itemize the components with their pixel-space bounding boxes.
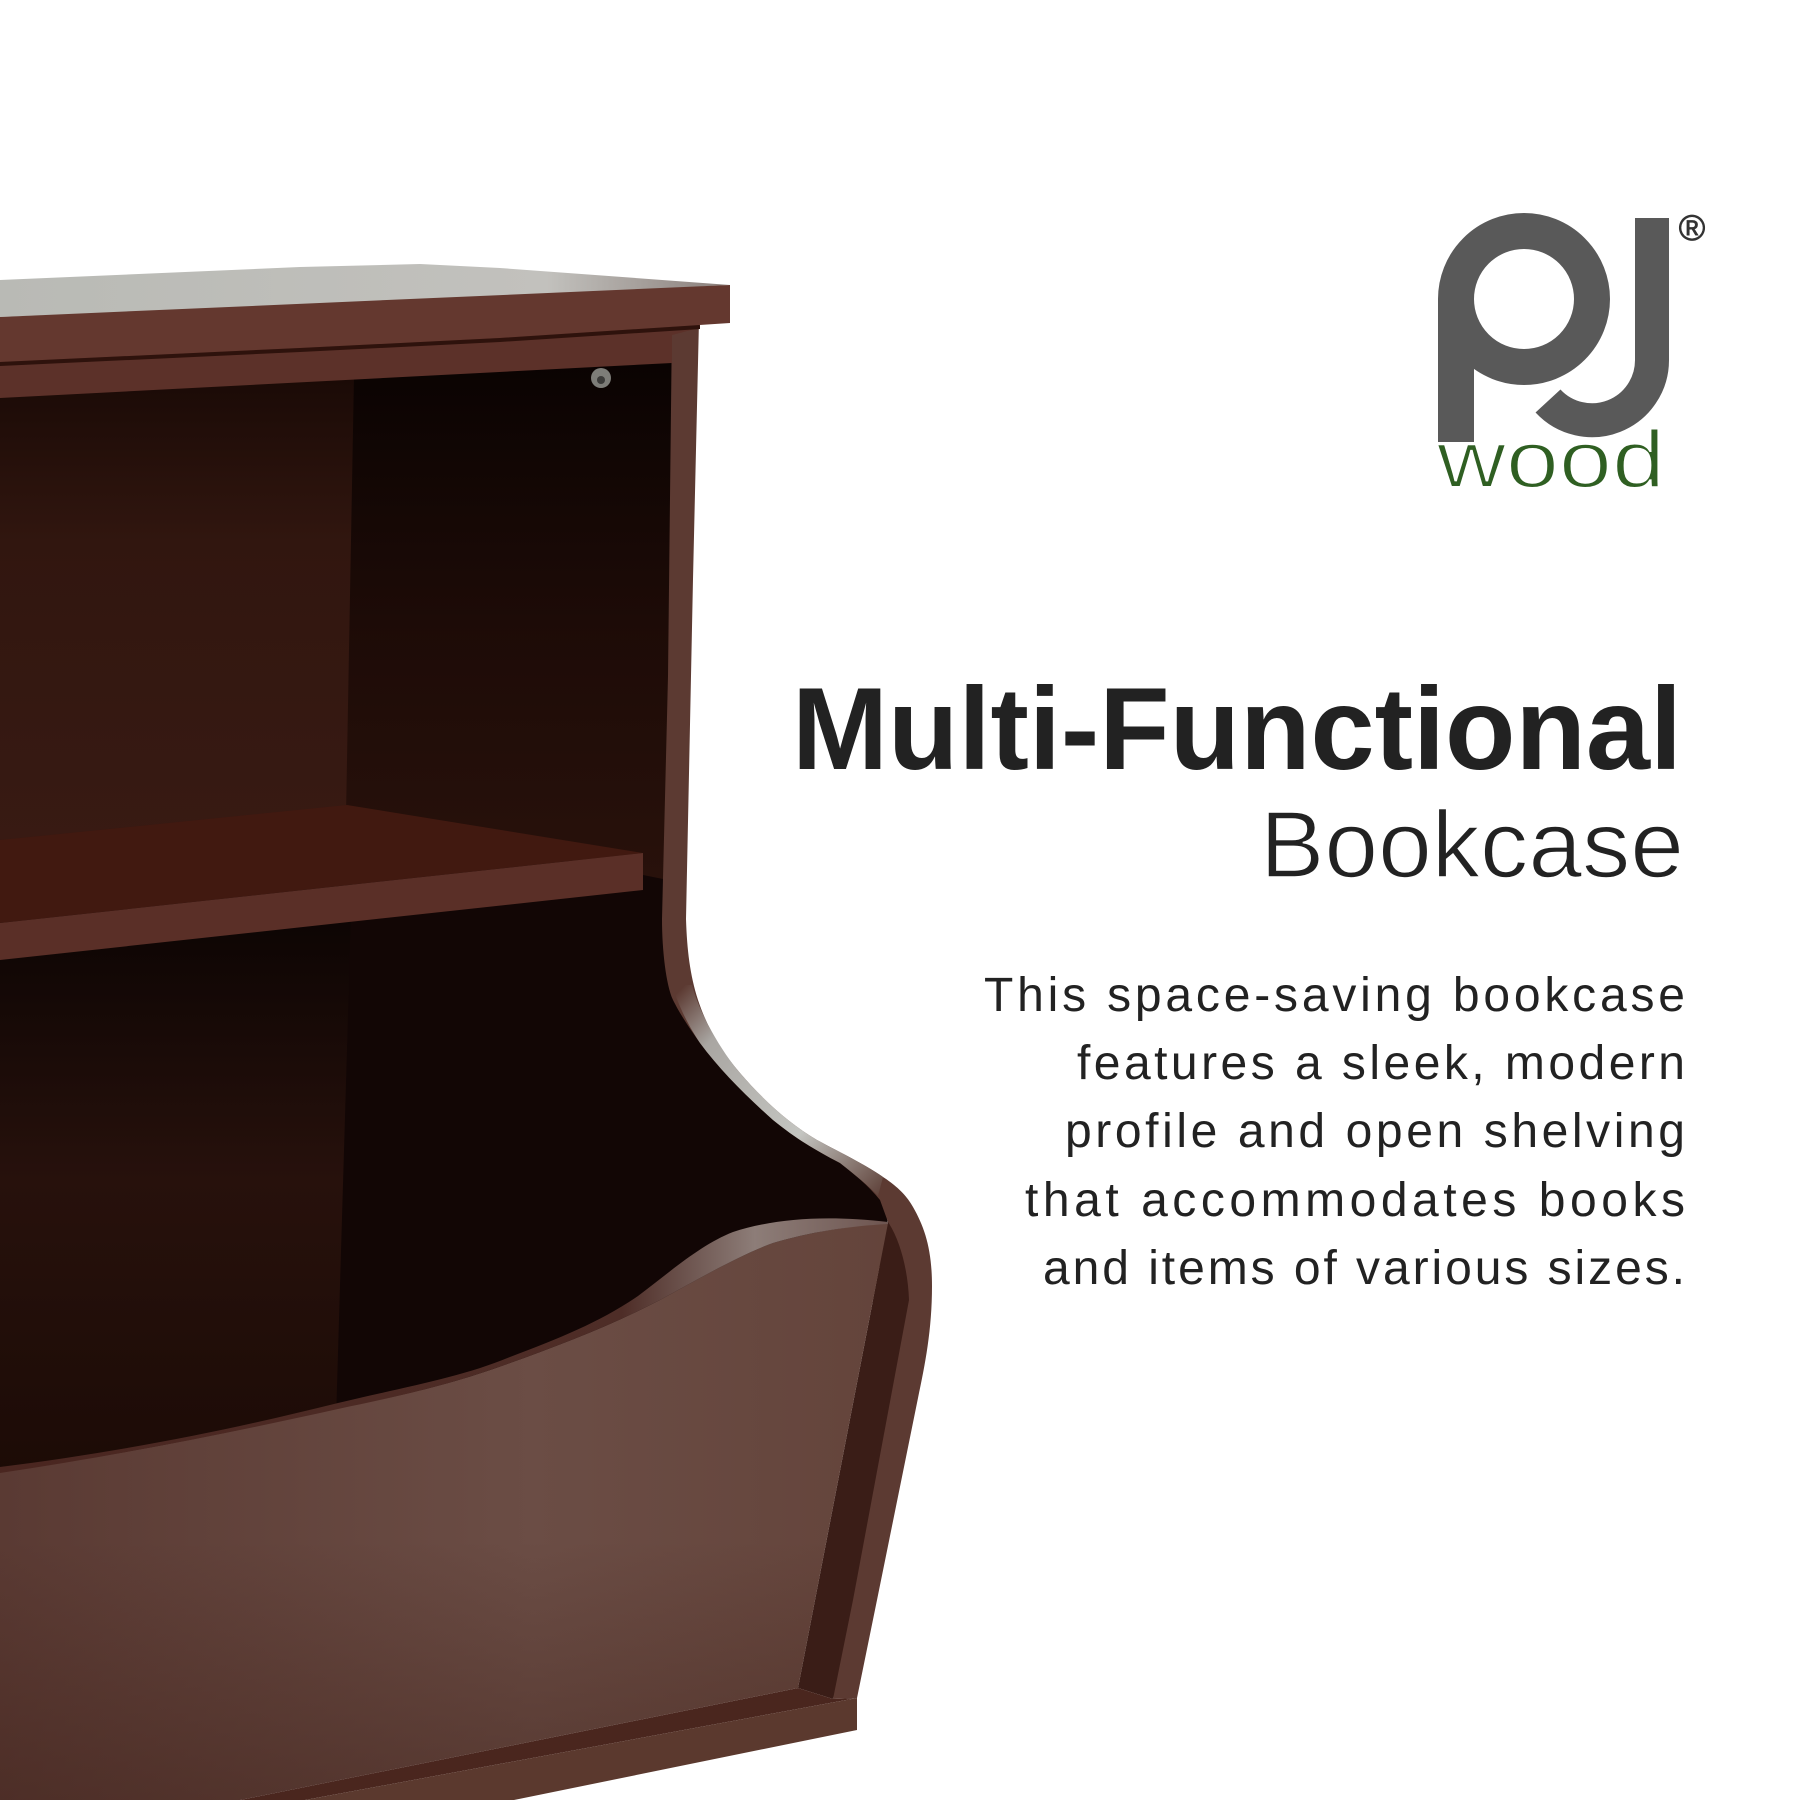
base front <box>305 1698 857 1800</box>
logo registered mark: ® <box>1679 207 1705 248</box>
shelf front edge <box>0 853 643 960</box>
interior backing <box>0 330 894 1500</box>
body text <box>984 969 1685 1295</box>
top board surface <box>0 264 730 317</box>
body text: and items of various sizes. <box>1043 1242 1685 1295</box>
base surface <box>240 1688 857 1800</box>
logo letter p <box>1456 231 1592 442</box>
body text: This space-saving bookcase <box>984 969 1685 1022</box>
front panel lip <box>0 1218 888 1473</box>
logo: pj wood <box>1436 207 1705 505</box>
heading: Bookcase: Bookcase <box>1260 792 1684 898</box>
logo letter j <box>1548 218 1652 420</box>
board shadow line <box>0 325 700 366</box>
apron <box>0 316 699 398</box>
logo word wood: wood <box>1436 415 1665 505</box>
front panel <box>0 1223 888 1800</box>
heading: Multi-Functional: Multi-Functional <box>792 663 1682 794</box>
side panel highlight <box>672 985 883 1196</box>
side panel <box>662 320 932 1699</box>
body text: features a sleek, modern <box>1077 1037 1685 1090</box>
front panel shade <box>0 1223 888 1800</box>
upper compartment side wall <box>346 360 672 880</box>
body text: profile and open shelving <box>1065 1105 1685 1158</box>
top board front edge <box>0 285 730 362</box>
illustration: bookcase <box>0 264 932 1800</box>
upper compartment back wall <box>0 375 358 850</box>
body text: that accommodates books <box>1025 1174 1685 1227</box>
shelf top <box>0 805 643 923</box>
screw <box>591 368 611 388</box>
lower compartment back wall <box>0 880 352 1480</box>
dark band of front panel side <box>798 1222 909 1699</box>
